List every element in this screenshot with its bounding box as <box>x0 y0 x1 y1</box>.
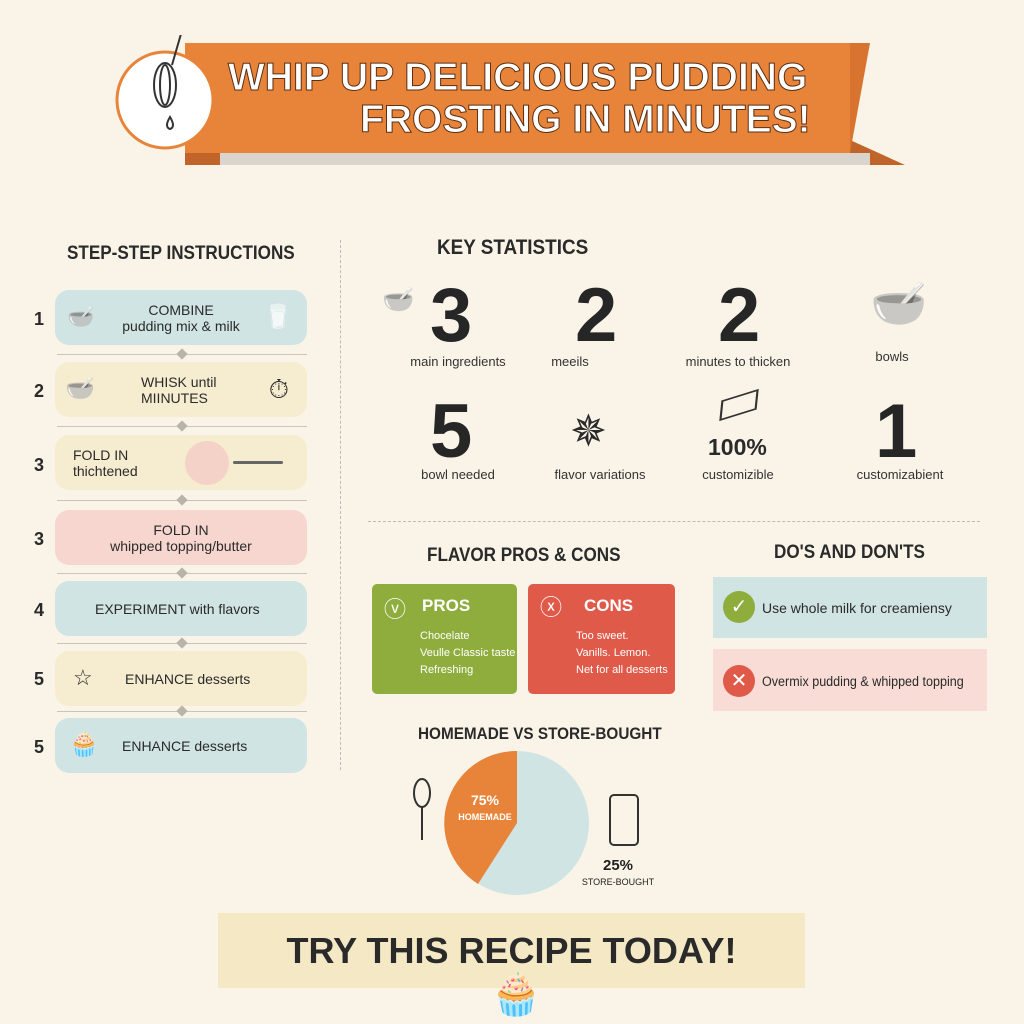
stats: minutes to thicken <box>686 354 790 369</box>
stats: 1 <box>875 389 917 474</box>
stats: meeils <box>551 354 589 369</box>
stats: 🥣 <box>382 284 414 314</box>
pros: Veulle Classic taste <box>420 647 515 659</box>
title: WHIP UP DELICIOUS PUDDING <box>228 56 807 99</box>
pros: Refreshing <box>420 664 473 676</box>
step 5b <box>55 718 307 773</box>
step 1: COMBINE <box>148 302 214 318</box>
title: FROSTING IN MINUTES! <box>360 98 811 141</box>
step 5: ☆ <box>73 665 93 690</box>
pie chart: STORE-BOUGHT <box>582 877 655 887</box>
pie chart <box>413 751 655 895</box>
cta banner: TRY THIS RECIPE TODAY! <box>286 930 737 971</box>
step 5: ENHANCE desserts <box>125 670 250 686</box>
step 1: 🥣 <box>67 304 94 329</box>
pie chart: HOMEMADE <box>458 812 512 822</box>
pie chart: 75% <box>471 792 500 808</box>
panel: steps <box>34 309 44 757</box>
cta banner <box>218 913 805 988</box>
do <box>713 577 987 638</box>
stats: 3 <box>430 273 472 358</box>
icon: cupcake: 🧁 <box>490 970 542 1017</box>
heading: homemade: HOMEMADE VS STORE-BOUGHT <box>418 724 662 743</box>
heading: key statistics: KEY STATISTICS <box>437 236 588 259</box>
dont <box>713 649 987 711</box>
do: ✓ <box>731 596 747 618</box>
step 3: thichtened <box>73 462 138 478</box>
step 3 <box>55 435 307 490</box>
stats: bowl needed <box>421 467 495 482</box>
cons: Too sweet. <box>576 630 629 642</box>
heading: pros cons: FLAVOR PROS & CONS <box>427 545 620 566</box>
stats: 100% <box>708 434 767 460</box>
pros: ⓥ <box>384 597 406 622</box>
step 1: pudding mix & milk <box>122 318 240 334</box>
step 4: EXPERIMENT with flavors <box>95 600 260 616</box>
step 5b: ENHANCE desserts <box>122 738 247 754</box>
do: Use whole milk for creamiensy <box>762 600 952 616</box>
stats: bowls <box>875 349 909 364</box>
stats: flavor variations <box>554 467 646 482</box>
step 2: WHISK until <box>141 374 216 390</box>
cons: ⓧ <box>540 595 562 620</box>
step 2: 🥣 <box>65 375 95 402</box>
cons: Vanills. Lemon. <box>576 647 650 659</box>
pie chart: 25% <box>603 857 633 874</box>
stats: 5 <box>430 389 472 474</box>
cons: Net for all desserts <box>576 664 668 676</box>
step 3b: whipped topping/butter <box>110 538 252 554</box>
heading: steps: STEP-STEP INSTRUCTIONS <box>67 243 295 264</box>
dont: ✕ <box>731 670 747 692</box>
panel: steps: 2 <box>34 381 44 401</box>
cons: CONS <box>584 596 633 615</box>
banner <box>116 35 905 165</box>
pros: Chocelate <box>420 630 470 642</box>
step 3: FOLD IN <box>73 446 128 462</box>
stats: customizabient <box>857 467 943 482</box>
stats: 2 <box>718 273 760 358</box>
stats: 🥣 <box>870 277 927 329</box>
heading: dos: DO'S AND DON'TS <box>774 542 925 563</box>
panel: steps: 4 <box>34 600 44 620</box>
stats <box>382 273 944 482</box>
panel: steps: 3 <box>34 529 44 549</box>
pros <box>372 584 517 694</box>
panel: steps: 5 <box>34 669 44 689</box>
step 1 <box>55 290 307 345</box>
stats: customizible <box>702 467 774 482</box>
panel: steps: 5 <box>34 737 44 757</box>
panel: steps: 1 <box>34 309 44 329</box>
step 4 <box>55 581 307 636</box>
step 1: 🥛 <box>263 303 293 330</box>
step 2: ⏱ <box>269 374 289 404</box>
stats: main ingredients <box>410 354 506 369</box>
step 5b: 🧁 <box>69 731 99 758</box>
step 5 <box>55 651 307 706</box>
step 2: MIINUTES <box>141 390 208 406</box>
step 2 <box>55 362 307 417</box>
panel: steps: 3 <box>34 455 44 475</box>
pros: PROS <box>422 596 470 615</box>
stats: 2 <box>575 273 617 358</box>
title <box>227 56 811 141</box>
cons <box>528 584 675 694</box>
step 3b: FOLD IN <box>153 522 209 538</box>
step 3b <box>55 510 307 565</box>
stats: ✵ <box>570 407 607 456</box>
dont: Overmix pudding & whipped topping <box>762 674 964 689</box>
